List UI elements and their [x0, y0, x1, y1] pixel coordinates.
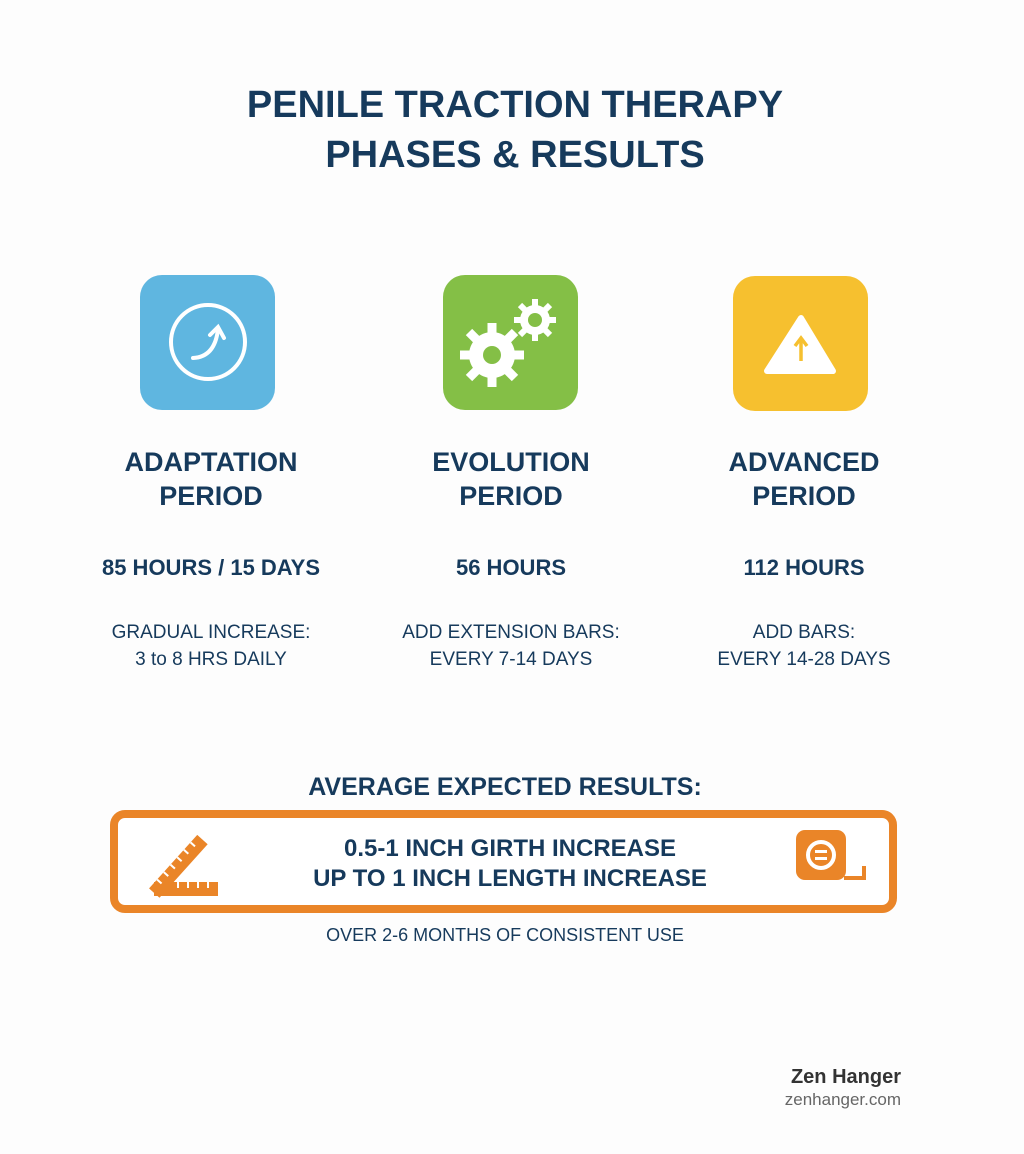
phase 3 text: ADD BARS: [753, 622, 855, 643]
phase 3 text: ADVANCED [728, 447, 880, 477]
phase 2 text: EVOLUTION [432, 447, 590, 477]
phase 2 text: PERIOD [459, 481, 563, 511]
phase 3 text [717, 447, 891, 670]
icon: advanced [733, 276, 868, 411]
title: PENILE TRACTION THERAPY [247, 84, 783, 126]
brand: Zen Hanger [791, 1066, 901, 1088]
results heading: AVERAGE EXPECTED RESULTS: [308, 773, 702, 801]
phase 1 text: 85 HOURS / 15 DAYS [102, 555, 320, 580]
brand [785, 1066, 901, 1109]
results box [110, 810, 897, 913]
icon: adaptation [140, 275, 275, 410]
phase 1 text: ADAPTATION [124, 447, 297, 477]
title: PHASES & RESULTS [325, 134, 705, 176]
icon: tape measure [796, 830, 866, 880]
phase 3 text: 112 HOURS [743, 555, 865, 580]
phase 2 text: ADD EXTENSION BARS: [402, 622, 620, 643]
results footnote: OVER 2-6 MONTHS OF CONSISTENT USE [326, 925, 684, 945]
phase 1 text [102, 447, 320, 670]
results text [313, 835, 707, 892]
phase 1 text: GRADUAL INCREASE: [112, 622, 310, 643]
phase 1 text: 3 to 8 HRS DAILY [135, 649, 287, 670]
title [247, 84, 783, 176]
phase 2 text [402, 447, 620, 670]
brand: zenhanger.com [785, 1090, 901, 1109]
phase 1 text: PERIOD [159, 481, 263, 511]
results text: 0.5-1 INCH GIRTH INCREASE [344, 835, 676, 862]
icon: evolution gears [443, 275, 578, 410]
icon: ruler [149, 834, 218, 898]
results text: UP TO 1 INCH LENGTH INCREASE [313, 865, 707, 892]
phase 2 text: EVERY 7-14 DAYS [430, 649, 592, 670]
phase 3 text: EVERY 14-28 DAYS [717, 649, 891, 670]
phase 2 text: 56 HOURS [456, 555, 566, 580]
phase 3 text: PERIOD [752, 481, 856, 511]
